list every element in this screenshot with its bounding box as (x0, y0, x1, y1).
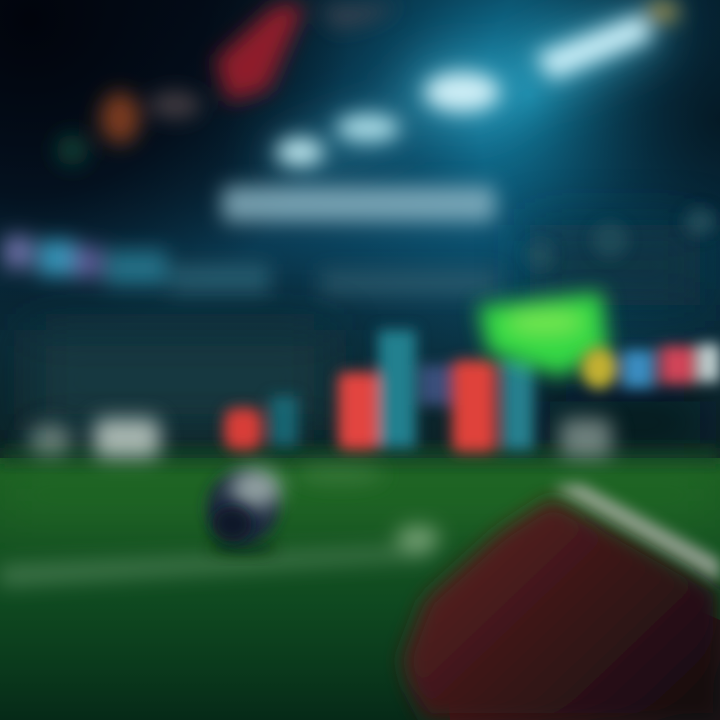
foreground hand (402, 484, 720, 720)
football (207, 468, 282, 556)
ceiling light halo (265, 5, 665, 180)
central scoreboard band (222, 186, 496, 222)
right side small lights (526, 208, 716, 269)
hanging flags top left (56, 5, 400, 166)
dim stands (30, 225, 700, 445)
hand body (402, 498, 720, 720)
white cuff edge (552, 484, 720, 582)
bar chart columns (224, 330, 534, 452)
dark right edge (480, 0, 720, 360)
pitch (0, 458, 720, 720)
green flag (478, 292, 608, 376)
colored banner left (4, 236, 500, 296)
horizon blend (0, 448, 720, 464)
pitch marking line (0, 464, 440, 586)
coloured banner right (581, 344, 720, 389)
hand base filling frame edges (445, 540, 720, 720)
white players / boards (28, 418, 612, 458)
dark upper-left corner (0, 0, 420, 340)
mown bright band on pitch (0, 470, 720, 520)
ceiling lights (276, 0, 680, 166)
spotlight glow (0, 0, 720, 440)
